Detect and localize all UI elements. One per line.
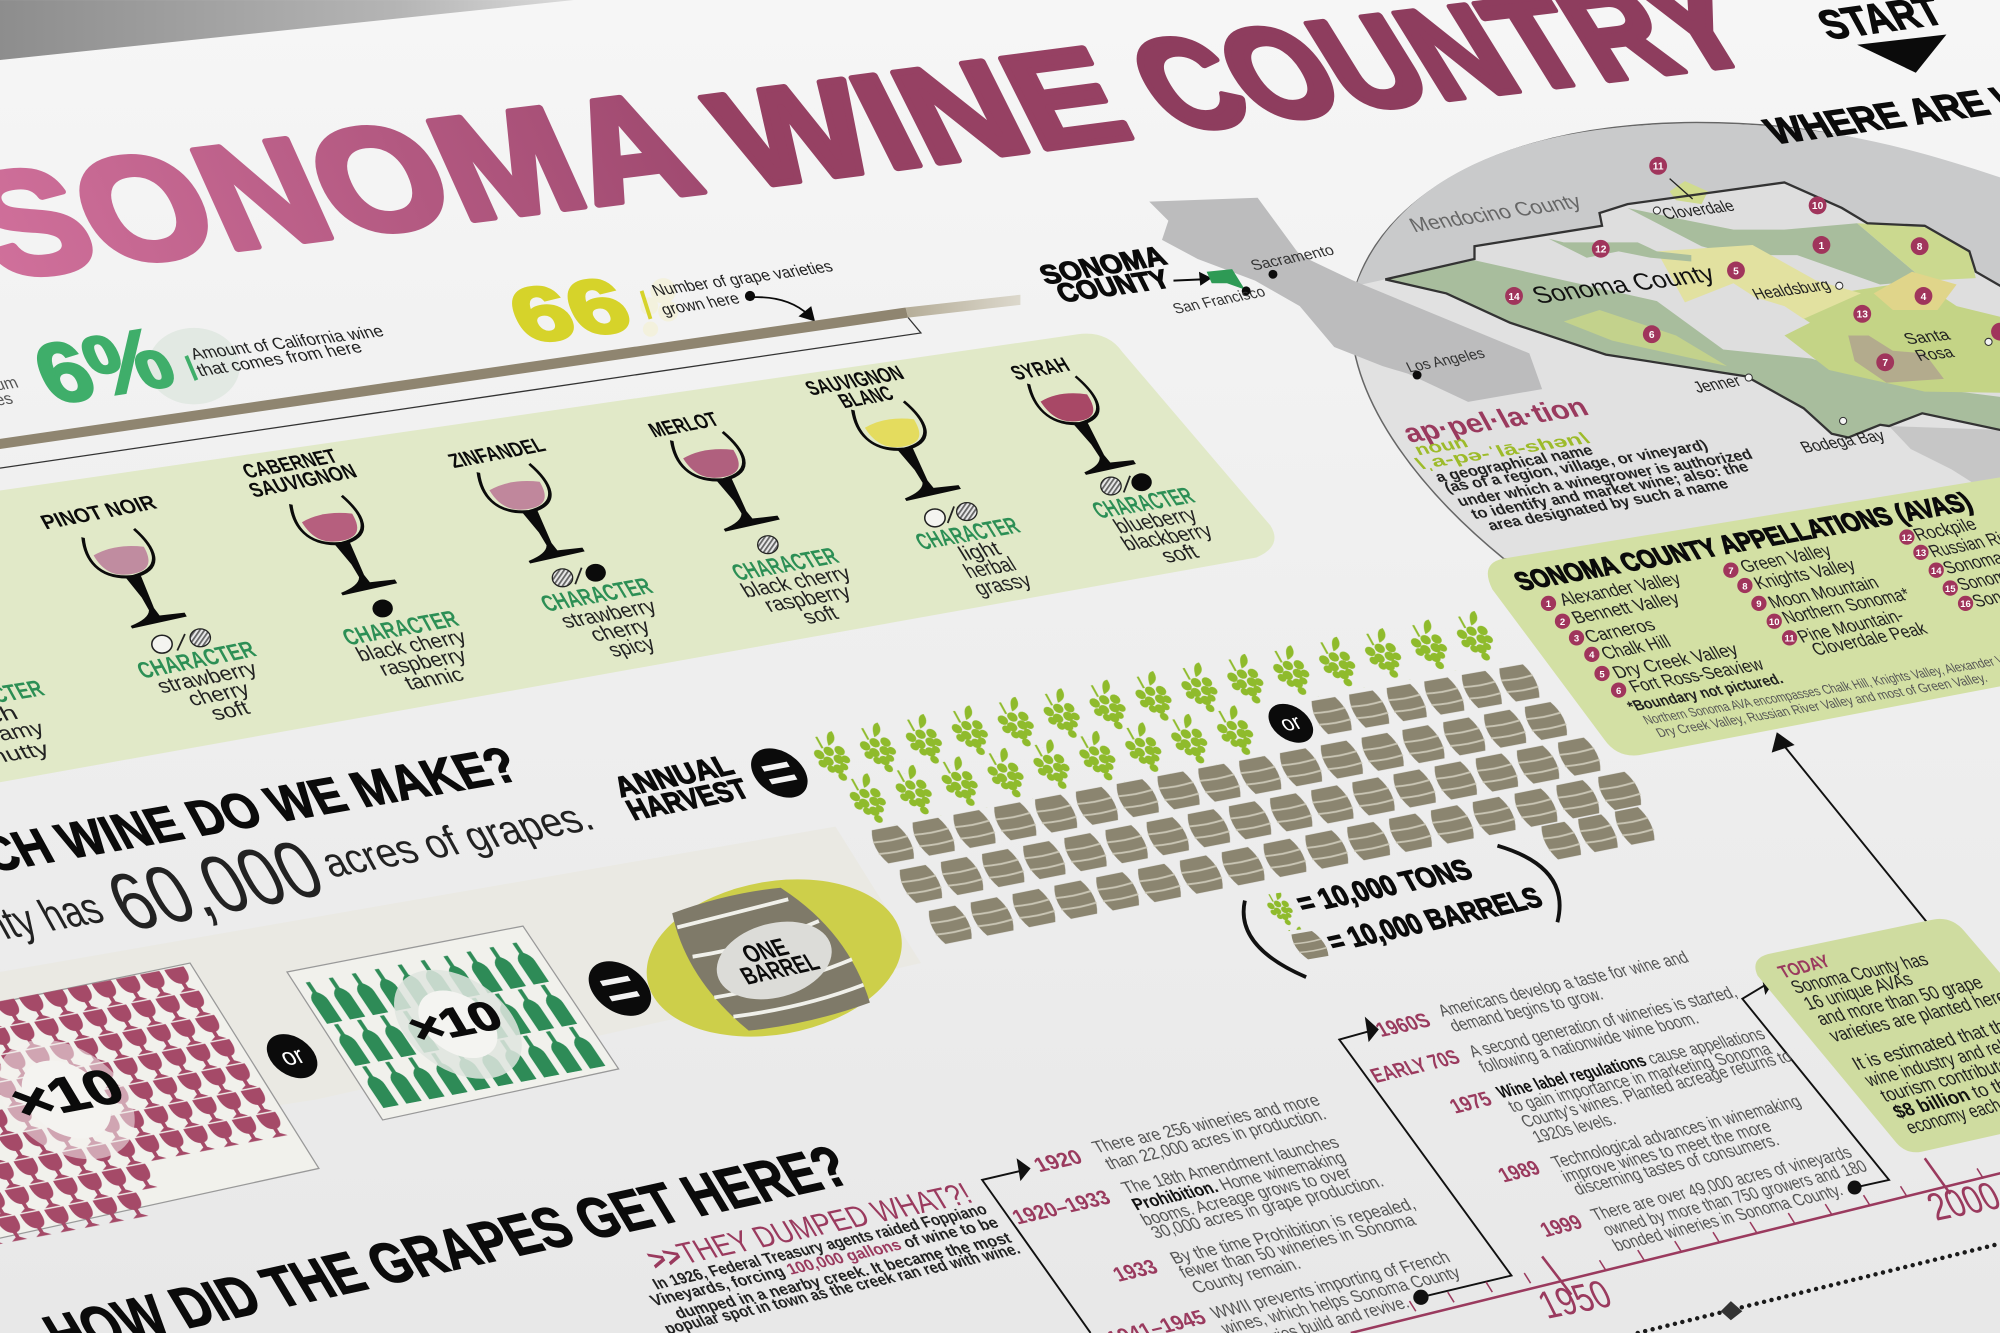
timeline entries: 1920s: fewer than 50 wineries in Sonoma	[1175, 1210, 1420, 1282]
ava numbers: 5	[1599, 669, 1605, 680]
glass: zinfandel: cherry	[586, 615, 655, 646]
ava names: Bennett Valley	[1568, 588, 1684, 627]
ava numbers: 4	[1589, 650, 1595, 661]
or badge	[257, 1030, 327, 1082]
timeline entries: 1960s to 1999: EARLY 70S	[1366, 1046, 1464, 1088]
sonoma county highlight	[1207, 269, 1245, 290]
ava: sonoma coast	[1385, 260, 2000, 438]
glass: pinot noir	[37, 491, 262, 725]
glass: syrah	[1006, 354, 1218, 567]
glass: syrah: blueberry	[1109, 504, 1202, 538]
definition: appellation: area designated by such a name	[1484, 476, 1732, 534]
ava names: Carneros	[1581, 615, 1659, 647]
map pin numbers: 8	[1917, 242, 1923, 253]
timeline entries: 1960s to 1999: discerning tastes of consumers.	[1569, 1130, 1783, 1199]
statement: 60,000 acres: acres of grapes.	[312, 793, 602, 887]
one barrel illustration	[634, 860, 914, 1056]
map place labels	[1405, 190, 1992, 457]
one barrel illustration: BARREL	[735, 948, 825, 990]
timeline entries: 1920s: 1920	[1030, 1146, 1087, 1177]
ava names: Green Valley	[1736, 540, 1836, 576]
ava numbers: 14	[1931, 566, 1942, 577]
timeline connector arrows	[982, 732, 1963, 1333]
equals badge	[577, 957, 663, 1020]
glass: pinot noir: cherry	[183, 678, 254, 711]
timeline axis	[1351, 1158, 2000, 1333]
timeline entries: 1960s to 1999: There are over 49,000 acres of vineyards	[1587, 1142, 1856, 1224]
ava: russian river valley	[1784, 281, 2000, 393]
harvest grape rows	[796, 609, 1513, 831]
timeline entries: 1960s to 1999: 1989	[1494, 1157, 1545, 1187]
definition: appellation: to identify and market wine; also: the	[1468, 459, 1752, 523]
stat: 6 percent	[0, 311, 387, 422]
glass: pinot noir: strawberry	[153, 657, 262, 698]
sonoma county locator label	[1034, 240, 1212, 308]
ava numbers	[1546, 533, 1971, 697]
stat: 66 varieties	[495, 258, 836, 359]
map place labels: Mendocino County	[1405, 190, 1586, 237]
ava: knights valley	[1857, 223, 1976, 281]
sonoma county locator label: SONOMA	[1034, 240, 1171, 290]
glass: zinfandel: spicy	[604, 633, 660, 662]
glass: merlot: raspberry	[760, 581, 856, 617]
panel: today	[1755, 919, 2000, 1152]
map pin numbers: 4	[1921, 292, 1927, 303]
glass: merlot: black cherry	[737, 562, 856, 602]
timeline entries: 1920s: booms. Acreage grows to over	[1137, 1162, 1356, 1229]
ava names	[1555, 514, 2000, 696]
glass: pinot noir: PINOT NOIR	[37, 491, 161, 534]
title: WINE	[688, 20, 1151, 216]
ava numbers: 12	[1902, 533, 1912, 544]
map pin numbers: 14	[1508, 292, 1520, 303]
ava names: Knights Valley	[1750, 555, 1860, 593]
timeline entries: 1920s: 1933	[1109, 1256, 1162, 1286]
timeline decade labels: 1950	[1531, 1273, 1619, 1327]
ava numbers: 8	[1742, 581, 1748, 592]
callout: they dumped what: dumped in a nearby creek. It became the most	[671, 1229, 1016, 1323]
stat: 66 varieties: 66	[495, 261, 644, 359]
timeline entries: 1920s: There are 256 wineries and more	[1088, 1090, 1324, 1157]
definition: appellation: (as of a region, village, or vineyard)	[1441, 437, 1711, 496]
ava numbers: 13	[1916, 548, 1926, 559]
ava numbers: 16	[1960, 599, 1971, 610]
callout: they dumped what: >>THEY DUMPED WHAT?!	[640, 1176, 978, 1277]
timeline entries: 1920s: 1920–1933	[1008, 1186, 1115, 1229]
california labels: San Francisco	[1170, 284, 1268, 318]
vineyard acreage bar	[0, 295, 1020, 468]
definition: appellation: ap·pel·la·tion	[1397, 391, 1594, 448]
start marker	[1810, 0, 1952, 73]
stat: 66 varieties: grown here	[658, 290, 743, 319]
glass: sauvignon blanc: light	[954, 538, 1006, 565]
timeline entries: 1960s to 1999: demand begins to grow.	[1445, 984, 1607, 1036]
ava names: Dry Creek Valley	[1609, 639, 1743, 682]
ava numbers: 9	[1756, 599, 1762, 610]
timeline entries: 1960s to 1999: A second generation of wineries is started,	[1464, 982, 1741, 1061]
sonoma county base	[1385, 182, 2000, 438]
ava: green valley	[1848, 336, 1944, 383]
dotted vine line	[1638, 1244, 2000, 1333]
definition: appellation: a geographical name	[1432, 442, 1596, 486]
timeline entries: 1920s: By the time Prohibition is repealed,	[1166, 1194, 1419, 1268]
glass: cabernet sauvignon	[238, 445, 471, 695]
glass: cabernet sauvignon: CABERNET	[238, 445, 342, 483]
stat: 6 percent: Amount of California wine	[187, 322, 387, 363]
glass: merlot: MERLOT	[644, 408, 724, 442]
panel: today: Sonoma County has	[1787, 950, 1933, 998]
definition: appellation: under which a winegrower is authorized	[1454, 446, 1756, 510]
glass: cabernet sauvignon: CHARACTER	[338, 606, 463, 650]
map place labels: Bodega Bay	[1797, 426, 1889, 457]
ava number markers	[1541, 529, 1973, 698]
stat: 6 percent: 6%	[19, 311, 188, 422]
timeline entries: 1920s: WWII prevents importing of French	[1207, 1247, 1454, 1323]
ava: russian river strip	[1755, 281, 1861, 319]
glass: zinfandel: CHARACTER	[536, 574, 658, 617]
map pin numbers: 11	[1653, 162, 1664, 173]
glass: merlot	[644, 408, 856, 629]
definition: appellation: \ˌa-pə-ˈlā-shən\	[1413, 430, 1593, 473]
timeline entries: 1920s: than 22,000 acres in production.	[1101, 1104, 1330, 1173]
glass: sauvignon blanc: grassy	[969, 569, 1036, 600]
map number pins	[1505, 157, 2000, 371]
ava names: Alexander Valley	[1555, 569, 1685, 610]
glass: sauvignon blanc: BLANC	[834, 383, 898, 413]
map place labels: Cloverdale	[1659, 197, 1738, 223]
statement: 60,000 acres	[0, 793, 602, 988]
ava names: Moon Mountain	[1764, 572, 1882, 612]
ava names: Chalk Hill	[1597, 632, 1674, 663]
ava: chalk hill	[1874, 272, 1957, 310]
glass: zinfandel: ZINFANDEL	[444, 434, 550, 473]
stat: 6 percent: that comes from here	[193, 338, 365, 380]
map pin numbers: 1	[1819, 241, 1825, 252]
timeline entries: 1960s to 1999: 1999	[1536, 1211, 1587, 1242]
map pin numbers: 10	[1812, 201, 1824, 212]
glass: sauvignon blanc	[801, 362, 1036, 600]
map place labels: Rosa	[1911, 343, 1958, 365]
panel: sonoma county appellations	[1488, 471, 2000, 755]
glass: left column text	[0, 675, 54, 768]
timeline decade labels	[1531, 1174, 2000, 1327]
leader for pine mountain	[1670, 179, 1693, 199]
or badge: or	[274, 1042, 310, 1071]
harvest legend: = 10,000 TONS	[1291, 854, 1478, 920]
callout: they dumped what	[640, 1176, 1024, 1333]
surrounding land	[1356, 124, 2000, 293]
ava names: Northern Sonoma*	[1778, 584, 1914, 627]
statement: 60,000 acres: 60,000	[91, 824, 340, 948]
harvest barrel rows	[863, 661, 1663, 948]
ava: fort ross	[1564, 310, 1727, 366]
glass: cabernet sauvignon: black cherry	[352, 625, 471, 666]
california silhouette	[1149, 198, 1542, 402]
one barrel illustration: ONE	[737, 934, 794, 969]
ava footnote: *Boundary not pictured.	[1624, 671, 1787, 715]
neighbouring land south	[1889, 426, 2000, 500]
panel: grape varieties	[0, 334, 1275, 784]
timeline entries: 1920s: County remain.	[1188, 1253, 1304, 1297]
glass: syrah: blackberry	[1117, 520, 1218, 555]
definition: appellation: noun	[1411, 433, 1471, 459]
glass: sauvignon blanc: SAUVIGNON	[801, 362, 908, 400]
map place labels: Healdsburg	[1749, 276, 1834, 304]
title	[0, 0, 1779, 308]
annual harvest label	[608, 744, 818, 827]
or badge	[1260, 701, 1321, 746]
timeline entries: 1960s to 1999: Wine label regulations cause appellations	[1493, 1024, 1769, 1102]
glass: sauvignon blanc: herbal	[959, 553, 1021, 583]
annual harvest label: ANNUAL	[608, 750, 740, 804]
glass: merlot: soft	[798, 602, 843, 629]
california labels	[1170, 242, 1488, 380]
timeline entries: 1920s: Prohibition. Home winemaking	[1128, 1148, 1349, 1214]
ava: alexander valley	[1628, 208, 1925, 284]
map pin numbers: 7	[1882, 358, 1888, 369]
timeline entries: 1960s to 1999: Technological advances in winemaking	[1547, 1091, 1804, 1172]
glass: syrah: SYRAH	[1006, 354, 1074, 385]
map place labels: Jenner	[1689, 372, 1745, 397]
panel: wine glasses x10	[0, 963, 323, 1245]
glass: pinot noir: CHARACTER	[132, 636, 260, 683]
ava numbers: 1	[1546, 599, 1552, 610]
timeline entries: 1960s to 1999: bonded wineries in Sonoma County.	[1609, 1180, 1847, 1255]
ava: dry creek valley	[1657, 245, 1816, 302]
panel: today: 16 unique AVAs	[1800, 969, 1917, 1015]
callout: they dumped what: In 1926, Federal Treasury agents raided Foppiano	[649, 1201, 991, 1293]
ava numbers: 7	[1728, 566, 1734, 577]
timeline entries: 1960s to 1999: to gain importance in marketing Sonoma	[1504, 1039, 1775, 1116]
ava numbers: 3	[1574, 634, 1579, 645]
ava names: Cloverdale Peak	[1808, 618, 1932, 659]
timeline entries: 1960s to 1999: 1960S	[1372, 1009, 1435, 1042]
timeline entries: 1960s to 1999: Americans develop a taste for wine and	[1434, 947, 1692, 1020]
county outline	[1385, 182, 2000, 438]
conversion backdrop	[0, 827, 921, 1148]
ava names: Pine Mountain-	[1794, 606, 1908, 647]
ava: pine mountain	[1670, 181, 1708, 204]
stat: 66 varieties: Number of grape varieties	[649, 258, 836, 300]
timeline entries: 1960s to 1999: following a nationwide wine boom.	[1475, 1008, 1702, 1076]
timeline entries: 1960s to 1999: County's wines. Planted acreage returns to	[1517, 1046, 1796, 1131]
panel: today: TODAY	[1774, 950, 1834, 982]
timeline entries: 1960s to 1999: owned by more than 750 growers and 180	[1598, 1156, 1871, 1240]
california labels: Sacramento	[1248, 242, 1337, 274]
glass: syrah: CHARACTER	[1087, 483, 1200, 524]
sonoma county locator label: COUNTY	[1051, 264, 1175, 308]
panel: wine bottles x10: ×10	[399, 992, 511, 1052]
california labels: Los Angeles	[1403, 345, 1488, 376]
circle map: where are we	[1149, 122, 2000, 600]
map pin numbers: 6	[1649, 330, 1655, 341]
harvest legend: = 10,000 BARRELS	[1322, 882, 1548, 958]
map pin numbers: 12	[1595, 245, 1607, 256]
glass: cabernet sauvignon: SAUVIGNON	[245, 460, 361, 502]
glass: zinfandel	[444, 434, 661, 662]
timeline entries: 1920s	[1008, 1090, 1464, 1333]
glass: syrah: soft	[1156, 541, 1203, 567]
glass: cabernet sauvignon: tannic	[400, 663, 468, 695]
glass: cabernet sauvignon: raspberry	[375, 644, 471, 681]
ava numbers: 2	[1560, 617, 1565, 628]
ava numbers: 11	[1784, 634, 1795, 645]
ava: rockpile	[1548, 239, 1691, 262]
timeline entries: 1960s to 1999	[1366, 947, 1871, 1255]
timeline entries: 1960s to 1999: 1920s levels.	[1528, 1109, 1620, 1147]
ava footnote: Dry Creek Valley, Russian River Valley and most of Green Valley.	[1653, 670, 1990, 740]
glass: pinot noir: soft	[206, 697, 254, 725]
panel: wine glasses x10: ×10	[0, 1059, 135, 1130]
ava numbers: 15	[1945, 584, 1956, 595]
panel: wine bottles x10	[287, 926, 619, 1120]
glass: sauvignon blanc: CHARACTER	[910, 513, 1025, 555]
callout: they dumped what: Vineyards, forcing 100,000 gallons of wine to be	[647, 1214, 1002, 1310]
or badge: or	[1275, 710, 1307, 736]
ava numbers: 6	[1616, 686, 1621, 697]
timeline entries: 1920s: 30,000 acres in grape production.	[1147, 1171, 1387, 1242]
glass: merlot: CHARACTER	[727, 543, 844, 586]
timeline entries: 1960s to 1999: 1975	[1446, 1088, 1497, 1118]
ava numbers: 10	[1769, 617, 1780, 628]
definition: appellation	[1397, 391, 1756, 534]
harvest legend	[1244, 846, 1560, 977]
map place labels: Sonoma County	[1528, 261, 1721, 309]
map pin numbers: 13	[1857, 310, 1868, 321]
map pin numbers	[1508, 162, 1927, 369]
map place labels: Santa	[1900, 325, 1954, 348]
glass: zinfandel: strawberry	[556, 595, 661, 633]
annual harvest label: HARVEST	[621, 774, 755, 827]
timeline entries: 1920s: The 18th Amendment launches	[1118, 1132, 1343, 1198]
ava names: Fort Ross-Seaview	[1625, 654, 1768, 696]
map pin numbers: 5	[1733, 266, 1739, 277]
timeline entries: 1960s to 1999: improve wines to meet the more	[1558, 1116, 1775, 1186]
ava names: Rockpile	[1910, 514, 1981, 545]
